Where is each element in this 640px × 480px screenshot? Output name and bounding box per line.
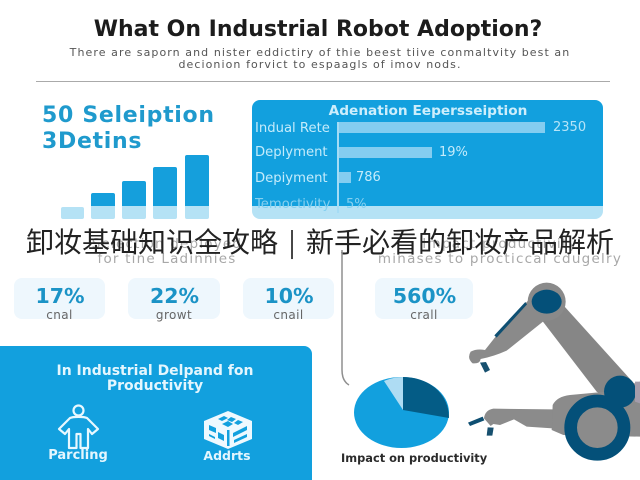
- stat value: 17%: [35, 284, 85, 308]
- stat label: cnal: [46, 308, 73, 322]
- stat card 3: [243, 278, 334, 319]
- icon label: Addrts: [203, 448, 251, 463]
- icon: cube: [204, 411, 252, 449]
- panel: productivity: [0, 346, 312, 480]
- row 2 label: Deplyment: [255, 145, 328, 160]
- left faded caption: Selection deployed: [92, 236, 242, 252]
- lower claw right: [487, 427, 494, 436]
- bar 1: [61, 207, 84, 219]
- row 2: [255, 145, 468, 160]
- row 1 label: Indual Rete: [255, 121, 330, 136]
- base body: [552, 382, 640, 437]
- panel: adoption chart: [252, 100, 603, 219]
- stat label: crall: [410, 308, 438, 322]
- stat value: 560%: [393, 284, 456, 308]
- stat value: 10%: [264, 284, 314, 308]
- bar chart: [61, 155, 209, 219]
- panel heading: In Industrial Delpand fon: [56, 363, 253, 379]
- right faded caption: Impact productivity: [422, 236, 578, 252]
- lower arm: [484, 409, 553, 428]
- right faded caption: [378, 236, 622, 267]
- stat label: cnail: [273, 308, 304, 322]
- subtitle text: There are saporn and nister eddictiry of thie beest tiive conmaltvity best an: [70, 46, 570, 59]
- stat value: 22%: [150, 284, 199, 308]
- left heading: [42, 103, 215, 154]
- pie slice: light: [384, 377, 403, 410]
- icon label: Parcling: [48, 448, 108, 463]
- banner headline: |: [288, 223, 296, 260]
- bar 4: [153, 167, 177, 219]
- shoulder ring: [528, 283, 566, 321]
- forearm accent: [494, 302, 527, 338]
- subtitle text: decionion forvict to espaagls of imov nods.: [178, 58, 462, 70]
- upper claw: [480, 362, 490, 373]
- left heading: 3Detins: [42, 129, 142, 154]
- row 4 value: 5%: [346, 197, 367, 212]
- rear plate: [635, 382, 640, 403]
- row 1: [255, 120, 586, 136]
- bar 2: [91, 193, 115, 219]
- elbow joint: [604, 376, 636, 408]
- lower claw left: [468, 417, 484, 426]
- upper forearm: [469, 298, 545, 363]
- pie caption: Impact on productivity: [341, 451, 487, 465]
- wheel: [571, 401, 624, 454]
- stat label: growt: [156, 308, 192, 322]
- stat card 2: [128, 278, 220, 319]
- shoulder joint: [532, 290, 562, 314]
- row 3 bar: [339, 172, 351, 183]
- row 2 bar: [339, 147, 432, 158]
- upper arm: [542, 303, 640, 417]
- pie slice: dark: [403, 377, 449, 418]
- panel heading: [56, 363, 253, 394]
- panel heading: Productivity: [107, 378, 203, 394]
- stat card 4: [375, 278, 473, 319]
- banner headline: 卸妆基础知识全攻略 新手必看的卸妆产品解析: [26, 221, 614, 261]
- bar 3: [122, 181, 146, 219]
- row 3 label: Depiyment: [255, 171, 328, 186]
- subtitle text: [70, 46, 570, 70]
- right faded caption: minases to procticcal cdugelry: [378, 251, 622, 267]
- left faded caption: [92, 236, 242, 267]
- pie slice: main: [354, 377, 449, 448]
- connector line: [341, 250, 350, 386]
- title: What On Industrial Robot Adoption?: [94, 17, 542, 42]
- bar 5: [185, 155, 209, 219]
- row 3 value: 786: [356, 170, 381, 185]
- row 4 label: Temoctivity: [255, 197, 330, 212]
- left faded caption: for tine Ladinnies: [98, 251, 236, 267]
- panel title: Adenation Eepersseiption: [329, 103, 527, 119]
- row 3: [255, 170, 381, 186]
- row 2 value: 19%: [439, 145, 468, 160]
- header divider: [36, 81, 610, 82]
- row 4: [254, 197, 367, 212]
- chart axis: [337, 122, 338, 213]
- left heading: 50 Seleiption: [42, 103, 215, 128]
- pie chart: [354, 377, 449, 448]
- stat card 1: [14, 278, 105, 319]
- row 1 bar: [339, 122, 545, 133]
- icon: person: [58, 404, 100, 450]
- robot arm: [468, 282, 640, 461]
- row 1 value: 2350: [553, 120, 586, 135]
